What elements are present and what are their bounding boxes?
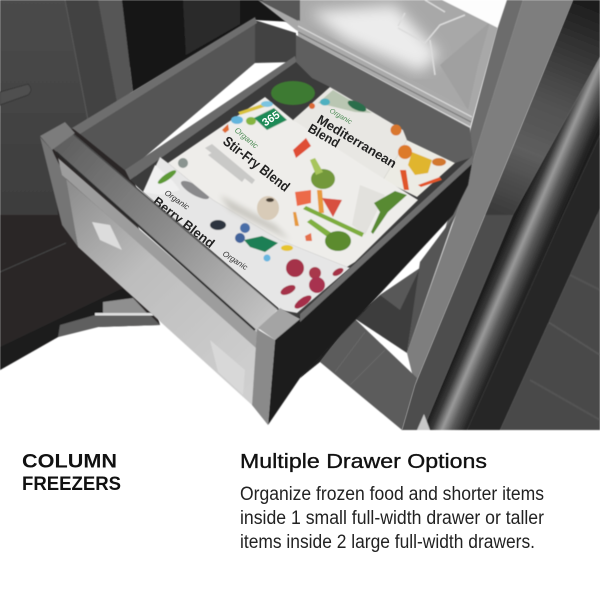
berry text: Berry Blend: [150, 194, 218, 251]
steel band: [52, 133, 278, 332]
side wall: [75, 20, 255, 172]
bag logo 365: [254, 108, 287, 130]
Organic: Organic: [233, 126, 260, 151]
bag text: [150, 108, 399, 272]
Stir-Fry Blend: Stir-Fry Blend: [220, 133, 293, 195]
brushed door panel: [500, 200, 600, 430]
hinge bracket: [58, 315, 160, 337]
drawer interior: [72, 17, 473, 320]
feature description: items inside 2 large full-width drawers.: [240, 532, 535, 553]
drawer floor: [130, 62, 473, 320]
back wall: [255, 20, 296, 63]
ice shelf: [258, 0, 507, 128]
lower Organic: Organic: [163, 188, 191, 212]
photo: refrigerator with open freezer drawer: [0, 0, 600, 430]
door edge strip: [98, 0, 133, 103]
section label: column freezers: [22, 450, 121, 495]
vegetables: [257, 138, 407, 251]
broccoli topper: [271, 81, 315, 105]
feature description: Organize frozen food and shorter items: [240, 484, 544, 505]
Blend: Blend: [306, 121, 342, 151]
door recess handle: [0, 84, 31, 105]
Mediterranean bag: [293, 87, 412, 180]
stir-fry bag: [168, 97, 418, 267]
365 logo text: 365: [260, 109, 282, 129]
dark right side: [268, 157, 473, 425]
gray center column and floor: [300, 0, 573, 430]
section label: column freezers: FREEZERS: [22, 473, 121, 495]
lower door panel: [0, 215, 115, 347]
feature description: inside 1 small full-width drawer or taller: [240, 508, 545, 529]
shelf stripes: [298, 20, 473, 128]
window glare: [442, 0, 507, 28]
drawer front: [40, 122, 473, 425]
seal: [178, 158, 188, 168]
reflection triangles: [354, 268, 420, 353]
Organic on berries: Organic: [221, 249, 249, 272]
Mediterranean: Mediterranean: [314, 112, 399, 171]
bar handle: [423, 57, 600, 430]
lower bag: [143, 157, 350, 313]
third bag: [383, 140, 455, 197]
frozen food bags: [143, 81, 455, 313]
striped floor: [320, 318, 417, 430]
right post: [252, 329, 275, 425]
clear ice bin: [398, 0, 465, 75]
left post: [40, 137, 78, 247]
feature description: [240, 484, 545, 553]
bag top graphics: [231, 116, 243, 124]
dark gap behind drawer: [122, 0, 293, 92]
section label: column freezers: COLUMN: [22, 450, 117, 472]
lower silver strip: [58, 158, 257, 348]
small print: [205, 144, 255, 184]
handle bracket strip: [467, 135, 600, 430]
right door and sheen: [402, 0, 600, 430]
left door panel: [0, 0, 88, 290]
Organic small: Organic: [328, 108, 353, 126]
feature heading: Multiple Drawer Options: [240, 451, 487, 473]
frosted glass front: [65, 178, 256, 405]
corner caps: [40, 122, 75, 150]
under-drawer shadow: [300, 312, 363, 378]
refrigerator left side: [0, 0, 293, 370]
drawer inner wall: [296, 35, 473, 163]
kick plate: [0, 288, 135, 370]
